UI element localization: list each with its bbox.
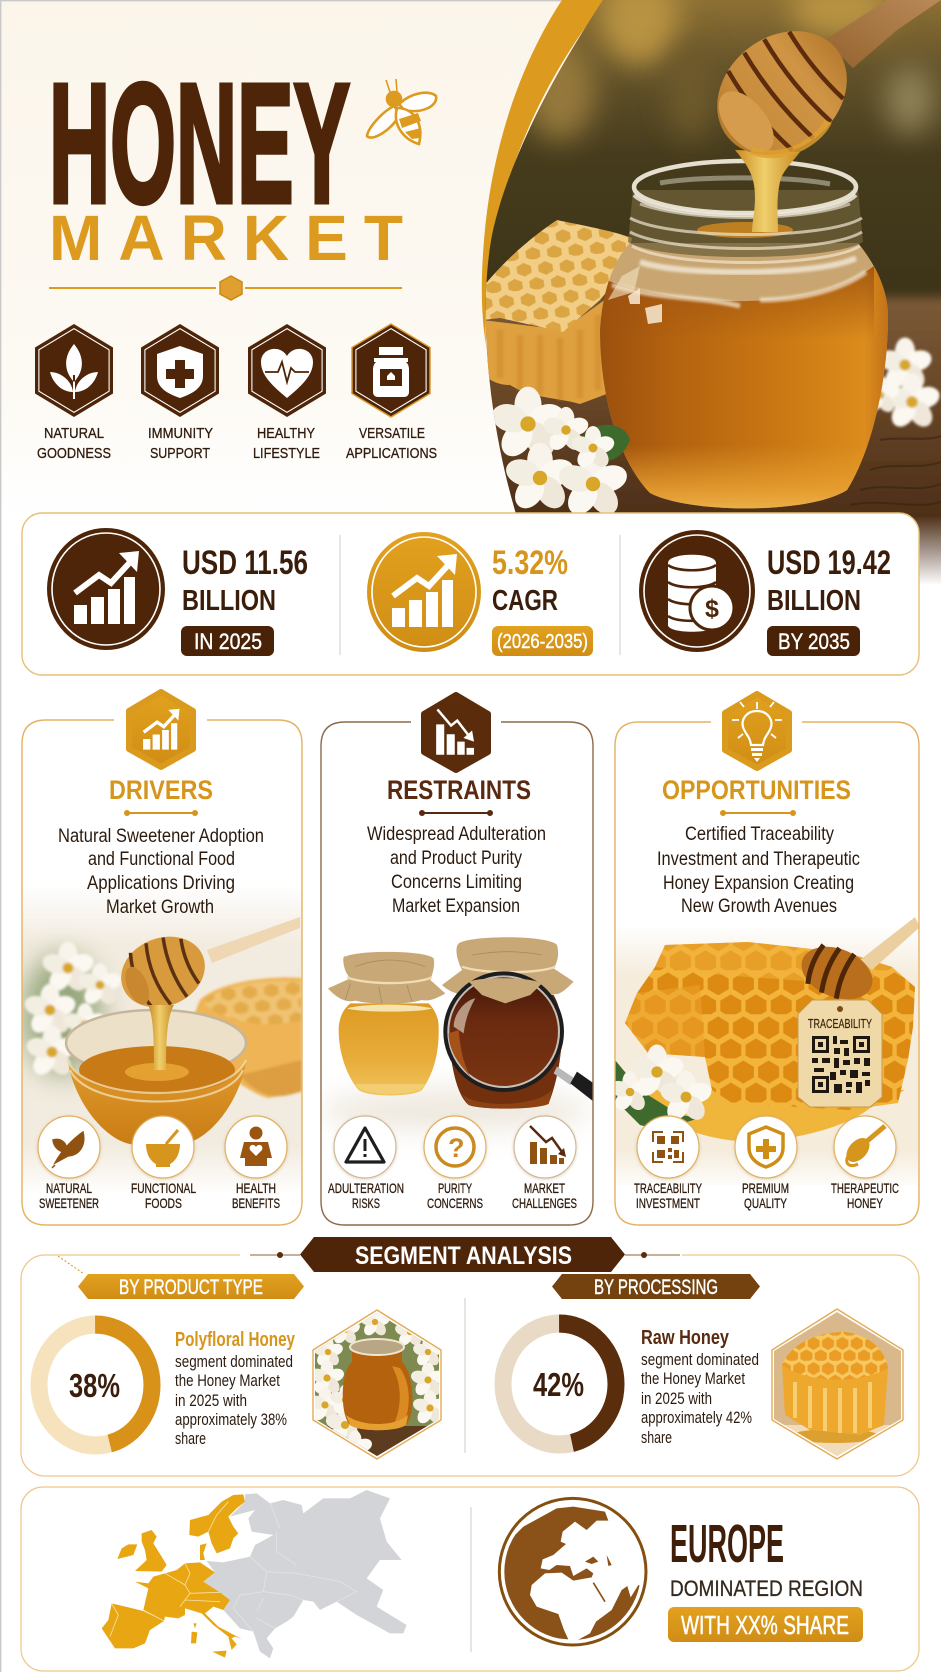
benefit: immunity support bbox=[141, 324, 219, 462]
benefit: natural goodness bbox=[35, 324, 113, 462]
labels: QUALITY bbox=[744, 1195, 787, 1211]
icon: purity concerns: ? bbox=[448, 1133, 464, 1163]
page edge bbox=[1, 1, 600, 1672]
description: Market Growth bbox=[106, 897, 214, 918]
tag: by processing: BY PROCESSING bbox=[594, 1276, 718, 1299]
labels: BENEFITS bbox=[232, 1195, 280, 1211]
jar left bbox=[328, 952, 445, 1095]
labels: PURITY bbox=[438, 1180, 472, 1196]
panel: segment analysis bbox=[21, 1237, 919, 1476]
hexagon photo: honeycomb cube bbox=[772, 1309, 904, 1460]
text: raw honey: share bbox=[641, 1429, 672, 1447]
label: SUPPORT bbox=[150, 445, 210, 462]
donut value: 38% bbox=[69, 1367, 120, 1404]
labels: NATURAL bbox=[46, 1180, 92, 1196]
labels: FOODS bbox=[145, 1195, 182, 1211]
text: raw honey bbox=[641, 1327, 759, 1447]
stat: CAGR: CAGR bbox=[492, 585, 558, 617]
honeycomb bbox=[486, 300, 606, 404]
icon: growth chart gold bbox=[367, 532, 481, 652]
labels: HEALTH bbox=[236, 1180, 276, 1196]
banner connectors bbox=[240, 1250, 682, 1260]
jar body glass bbox=[600, 243, 888, 508]
right flowers bbox=[877, 336, 941, 428]
dipper handle bbox=[860, 917, 920, 970]
drivers photo bbox=[22, 900, 302, 1182]
photo fade bbox=[913, 518, 941, 585]
icon: globe bbox=[499, 1498, 646, 1645]
traceability tag: TRACEABILITY bbox=[808, 1016, 872, 1031]
stat: market size 2025: BILLION bbox=[182, 585, 276, 617]
map: non-dominant countries bbox=[203, 1490, 407, 1658]
hexagon photo: honey jar with flowers bbox=[312, 1309, 442, 1460]
heading: DRIVERS bbox=[109, 775, 213, 805]
stat: market size 2035 bbox=[639, 530, 891, 656]
flowers bbox=[578, 425, 630, 461]
stat: CAGR bbox=[367, 532, 593, 656]
stat: market size 2025: IN 2025 bbox=[194, 629, 262, 654]
opportunities photo bbox=[616, 917, 918, 1180]
restraints photo bbox=[322, 937, 592, 1139]
banner: segment analysis bbox=[300, 1237, 625, 1272]
text: HONEY bbox=[49, 49, 350, 239]
panel: opportunities bbox=[608, 694, 920, 1225]
jar honey bbox=[596, 258, 896, 520]
stat: market size 2035: USD 19.42 bbox=[767, 544, 891, 582]
icon: coins bbox=[639, 530, 755, 652]
label: LIFESTYLE bbox=[253, 445, 320, 462]
text: polyfloral honey: segment dominated bbox=[175, 1353, 293, 1371]
stat: market size 2035: BY 2035 bbox=[778, 629, 850, 654]
hero photo: honey jar and dipper bbox=[470, 0, 941, 597]
hexagon icon: drivers bbox=[129, 692, 193, 767]
mini divider bbox=[419, 810, 493, 816]
mini divider bbox=[720, 810, 796, 816]
magnifier bbox=[445, 973, 594, 1102]
benefit: healthy lifestyle bbox=[248, 324, 326, 462]
header background bbox=[0, 0, 620, 520]
tag: by product type: BY PRODUCT TYPE bbox=[119, 1276, 263, 1299]
share badge: WITH XX% SHARE bbox=[681, 1610, 849, 1640]
text: raw honey: segment dominated bbox=[641, 1351, 759, 1369]
text: raw honey: approximately 42% bbox=[641, 1409, 752, 1427]
labels: THERAPEUTIC bbox=[831, 1180, 899, 1196]
glass bowl back bbox=[64, 1008, 248, 1063]
dipper head bbox=[121, 936, 205, 1007]
icon: shield bbox=[157, 346, 203, 398]
description: Applications Driving bbox=[87, 873, 235, 894]
honey puddle bbox=[640, 1090, 905, 1142]
labels: MARKET bbox=[524, 1180, 565, 1196]
stat: CAGR: (2026-2035) bbox=[497, 631, 588, 653]
text: polyfloral honey: approximately 38% bbox=[175, 1411, 287, 1429]
stat: CAGR: 5.32% bbox=[492, 544, 568, 582]
honey drip bbox=[148, 1005, 174, 1070]
donut: raw honey 42% bbox=[503, 1324, 616, 1444]
icon: therapeutic honey bbox=[834, 1116, 896, 1178]
heading: OPPORTUNITIES bbox=[662, 775, 851, 805]
icon: growth chart bbox=[47, 528, 165, 650]
icon: functional foods bbox=[132, 1116, 194, 1178]
text: polyfloral honey bbox=[175, 1329, 296, 1448]
panel: regional analysis bbox=[21, 1487, 919, 1671]
description: Investment and Therapeutic bbox=[657, 849, 860, 870]
label: IMMUNITY bbox=[148, 425, 213, 442]
icon: heart bbox=[261, 349, 313, 398]
panel: drivers bbox=[22, 692, 302, 1225]
description: Market Expansion bbox=[392, 896, 520, 917]
icon: natural sweetener bbox=[38, 1116, 100, 1178]
blurred comb bbox=[190, 977, 302, 1098]
description: Concerns Limiting bbox=[391, 872, 522, 893]
icon: coins: $ bbox=[705, 595, 719, 623]
label: GOODNESS bbox=[37, 445, 111, 462]
map: dominant countries bbox=[102, 1494, 245, 1658]
panel: regional analysis: EUROPE bbox=[670, 1514, 784, 1574]
icon: premium quality bbox=[735, 1116, 797, 1178]
icon: jar bbox=[373, 347, 409, 397]
label: HEALTHY bbox=[257, 425, 315, 442]
mini divider bbox=[124, 810, 198, 816]
text: raw honey: the Honey Market bbox=[641, 1370, 745, 1388]
flowers bbox=[616, 1060, 695, 1126]
text: polyfloral honey: in 2025 with bbox=[175, 1392, 247, 1410]
hexagon icon: restraints bbox=[424, 695, 488, 770]
labels: ADULTERATION bbox=[328, 1180, 404, 1196]
dipper handle bbox=[825, 0, 941, 68]
text: raw honey: Raw Honey bbox=[641, 1327, 730, 1349]
labels: PREMIUM bbox=[742, 1180, 789, 1196]
dipper handle bbox=[207, 917, 300, 963]
honey drip bbox=[735, 150, 800, 232]
panel: market statistics bbox=[22, 513, 919, 675]
icon: adulteration risks bbox=[334, 1116, 396, 1178]
dipper head bbox=[717, 30, 847, 158]
labels: SWEETENER bbox=[39, 1195, 99, 1211]
label: APPLICATIONS bbox=[346, 445, 437, 462]
icon: market challenges bbox=[514, 1116, 576, 1178]
description: and Product Purity bbox=[390, 848, 522, 869]
label: VERSATILE bbox=[359, 425, 425, 442]
description: Honey Expansion Creating bbox=[663, 873, 854, 894]
gold swoosh bbox=[482, 0, 606, 345]
hexagon icon: opportunities bbox=[725, 694, 789, 768]
labels: TRACEABILITY bbox=[634, 1180, 702, 1196]
donut: polyfloral 38% bbox=[39, 1325, 152, 1445]
labels: INVESTMENT bbox=[636, 1195, 700, 1211]
text: polyfloral honey: share bbox=[175, 1430, 206, 1448]
share badge bbox=[668, 1607, 863, 1642]
labels: CONCERNS bbox=[427, 1195, 483, 1211]
stat: market size 2025 bbox=[47, 528, 308, 656]
benefit: versatile applications bbox=[346, 324, 437, 462]
icon: traceability investment bbox=[637, 1116, 699, 1178]
QR code bbox=[812, 1036, 870, 1093]
label: NATURAL bbox=[44, 425, 104, 442]
dipper head bbox=[802, 943, 872, 1000]
labels: RISKS bbox=[352, 1195, 380, 1211]
text: polyfloral honey: Polyfloral Honey bbox=[175, 1329, 296, 1351]
stat: market size 2035: BILLION bbox=[767, 585, 861, 617]
labels: HONEY bbox=[847, 1195, 883, 1211]
icon: purity concerns bbox=[424, 1116, 486, 1178]
divider with hexagon bbox=[49, 276, 402, 300]
honeycomb bbox=[625, 942, 915, 1110]
map: Europe bbox=[102, 1490, 407, 1658]
donut value: 42% bbox=[533, 1366, 584, 1403]
icon: bee bbox=[367, 79, 436, 144]
panel: restraints bbox=[320, 695, 594, 1225]
text: polyfloral honey: the Honey Market bbox=[175, 1372, 280, 1390]
description: New Growth Avenues bbox=[681, 896, 837, 917]
description: Widespread Adulteration bbox=[367, 824, 546, 845]
heading: RESTRAINTS bbox=[387, 775, 531, 805]
text: raw honey: in 2025 with bbox=[641, 1390, 712, 1408]
labels: FUNCTIONAL bbox=[131, 1180, 196, 1196]
honey bowl bbox=[68, 1062, 246, 1145]
title: MARKET: MARKET bbox=[49, 202, 403, 274]
description: and Functional Food bbox=[88, 849, 235, 870]
labels: CHALLENGES bbox=[512, 1195, 577, 1211]
icon: leaves bbox=[50, 344, 98, 399]
icon: health benefits bbox=[225, 1116, 287, 1178]
jar neck bbox=[628, 190, 863, 257]
description: Natural Sweetener Adoption bbox=[58, 826, 264, 847]
jar right bbox=[442, 937, 574, 1109]
subheading: DOMINATED REGION bbox=[670, 1576, 863, 1601]
stat: market size 2025: USD 11.56 bbox=[182, 544, 308, 582]
banner: segment analysis: SEGMENT ANALYSIS bbox=[355, 1242, 572, 1270]
jar rim bbox=[634, 161, 856, 213]
description: Certified Traceability bbox=[685, 824, 834, 845]
traceability tag bbox=[798, 1000, 882, 1107]
